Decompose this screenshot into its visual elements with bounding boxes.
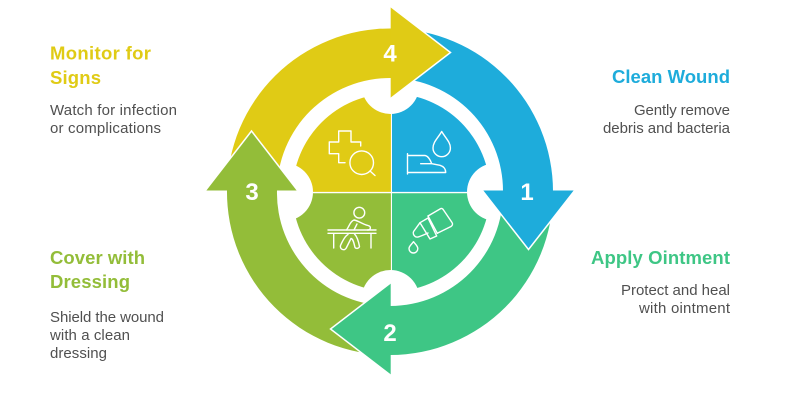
description: apply ointment: with ointment [638,300,731,317]
description: cover with dressing [49,309,164,362]
number 3: 3 [245,179,259,206]
number 4: 4 [383,40,397,68]
text: clean wound [603,66,731,137]
icon: person at table [328,207,376,250]
description: cover with dressing: with a clean [49,327,130,344]
icon: ointment dropper [409,208,453,253]
heading: monitor for signs [50,42,151,88]
icon: drop and skin [408,132,450,174]
arc: yellow ring segment [227,28,392,192]
description: apply ointment: Protect and heal [621,282,730,299]
heading: cover with dressing: Cover with [50,247,145,268]
description: monitor for signs: Watch for infection [50,102,177,119]
heading: cover with dressing: Dressing [50,271,130,292]
arrow: step 4 yellow head [391,6,450,98]
description: clean wound: debris and bacteria [603,120,731,137]
icon: medical plus with magnifier [329,131,375,176]
heading: apply ointment: Apply Ointment [591,247,730,268]
arrow: step 2 green [330,192,553,376]
text: apply ointment [591,247,731,317]
arrow: step 1 blue [392,28,575,250]
text: cover with dressing [49,247,164,362]
description: cover with dressing: Shield the wound [50,309,164,326]
heading: clean wound: Clean Wound [612,66,730,87]
text: monitor for signs [50,42,177,137]
description: monitor for signs: or complications [50,120,161,137]
description: cover with dressing: dressing [50,345,107,362]
heading: monitor for signs: Signs [50,67,101,88]
arrow: step 3 olive [205,131,391,355]
description: clean wound [603,102,731,137]
panel: inner quadrants [255,56,525,328]
heading: cover with dressing [50,247,145,292]
description: monitor for signs [50,102,177,137]
number 1: 1 [520,179,534,206]
heading: monitor for signs: Monitor for [50,42,151,64]
description: clean wound: Gently remove [634,102,730,119]
number 2: 2 [383,320,397,347]
description: apply ointment [621,282,731,317]
